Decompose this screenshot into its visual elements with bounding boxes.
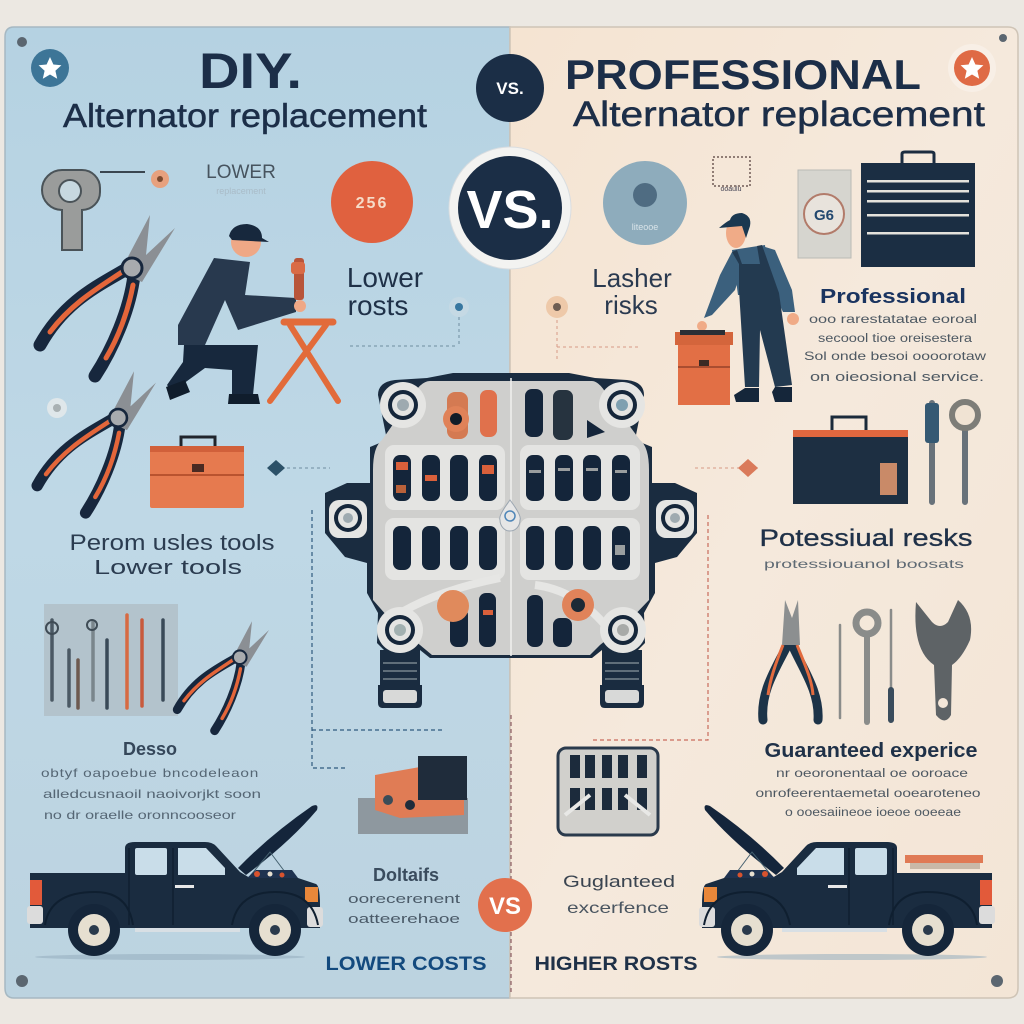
icon: dark tool chest [861,152,975,267]
text block: professional: Sol onde besoi oooorotaw [804,349,986,363]
text block: guaranteed experience: o ooesaiineoe ioeoe ooeeae [785,807,961,819]
text: guaranteed experience: Guglanteed [563,872,675,891]
label: lower: replacement [216,186,266,196]
text block: professional: on oieosional service. [810,369,984,384]
text: guaranteed experience: excerfence [567,900,669,917]
title: professional: PROFESSIONAL [565,51,921,98]
text: lower costs: rosts [348,290,408,321]
text block: professional: Professional [820,286,966,308]
text: lower costs [347,262,423,321]
text block: guaranteed experience: Guaranteed experice [764,740,978,762]
text block: guaranteed experience: onrofeerentaemetal ooearoteneo [756,786,981,800]
text: higher risks [592,263,672,320]
panel: DIY side [5,27,510,998]
icon: wrench and screwdriver [925,402,978,502]
icon: pliers medium [37,371,156,513]
icon: pliers large [40,215,175,376]
icon: alternator part diagram [42,170,169,250]
text: potential risks: Potessiual resks [760,525,972,552]
icon: orange toolbox [150,437,244,508]
white straps [402,578,605,625]
illustration: kneeling DIY mechanic [166,224,306,404]
text block: guaranteed experience [756,740,981,819]
icon: small label sketch: ooaulu [720,186,742,193]
image: engine detail [358,756,468,834]
subtitle: DIY alternator replacement: Alternator replacement [63,97,427,134]
feet [378,650,644,708]
text: lower costs: Lower [347,262,423,293]
text block: DIY details: obtyf oapoebue bncodeleaon [41,766,259,780]
panel: professional side [510,27,1018,998]
text: person uses tools [70,530,274,579]
illustration: orange work cabinet [675,330,733,405]
text: guaranteed experience [563,872,675,917]
badge: bottom VS: VS [489,893,521,920]
badge: bottom VS [478,878,532,932]
illustration: DIY truck [27,805,323,960]
orange bolts [443,406,469,432]
badge: large VS: VS. [466,180,554,240]
hot spots in slots [396,462,494,615]
label: lower costs: LOWER COSTS [326,954,486,975]
illustration: small alternator image [558,748,658,835]
slots [393,389,630,647]
connector [695,459,760,477]
icon: blue gauge badge [603,161,687,245]
light housing [373,381,649,655]
text block: professional: secoool tioe oreisestera [818,333,973,345]
badge: orange 256: 256 [356,195,388,212]
slot frames [385,445,640,580]
badge: small VS: VS. [496,79,524,98]
illustration: professional mechanic [697,213,799,402]
text block: professional [804,286,986,384]
icon: professional pliers [763,600,818,720]
label: lower: LOWER [206,162,276,183]
illustration: central alternator [325,373,697,708]
text block: DIY details [41,739,261,822]
text: details [348,865,461,926]
center badge [500,500,520,531]
icon: marker [546,296,640,360]
icon: blue star badge [31,49,69,87]
badge: large VS [449,147,571,269]
icon: marker [350,297,469,347]
text: higher risks: Lasher [592,263,672,293]
text block: DIY details: no dr oraelle oronncooseor [44,808,236,822]
label: lower [206,162,276,196]
title: professional [565,51,985,134]
icon: small marker [47,398,67,418]
icon: certificate: G6 [814,207,834,224]
subtitle: professional alternator replacement: Alternator replacement [573,95,985,134]
text: higher risks: risks [604,290,658,320]
connector lines [312,510,708,992]
outer dark body [325,373,697,658]
icon: blue gauge badge: liteooe [632,222,658,232]
icon: small label sketch [713,157,750,193]
label: higher costs: HIGHER ROSTS [534,954,698,975]
text: potential risks [760,525,972,571]
icon: slim tools [840,610,891,722]
connector [267,460,330,476]
icon: cargo on truck bed [905,855,983,869]
corner bolts [329,382,694,653]
text block: DIY details: alledcusnaoil naoivorjkt soon [43,787,261,801]
title: DIY: DIY. [199,43,302,99]
icon: large wrench [915,600,971,720]
icon: pliers small [177,621,269,731]
text: potential risks: protessiouanol boosats [764,557,964,571]
illustration: orange work stand [270,322,338,401]
text block: guaranteed experience: nr oeoronentaal oe ooroace [776,768,968,780]
illustration: professional truck [699,805,995,960]
text: person uses tools: Perom usles tools [70,530,274,555]
title: DIY [63,43,427,134]
text: details: Doltaifs [373,865,439,885]
text block: DIY details: Desso [123,739,177,759]
badge: orange 256 [331,161,413,243]
icon: orange star badge [948,44,996,92]
text block: professional: ooo rarestatatae eoroal [809,314,977,326]
text: details: oatteerehaoe [348,911,460,926]
icon: certificate [798,170,851,258]
text: person uses tools: Lower tools [94,557,242,579]
panel: tool board [44,604,178,716]
text: details: oorecerenent [348,891,461,906]
badge: small VS [476,54,544,122]
icon: dark toolbox with red panel [793,417,908,504]
